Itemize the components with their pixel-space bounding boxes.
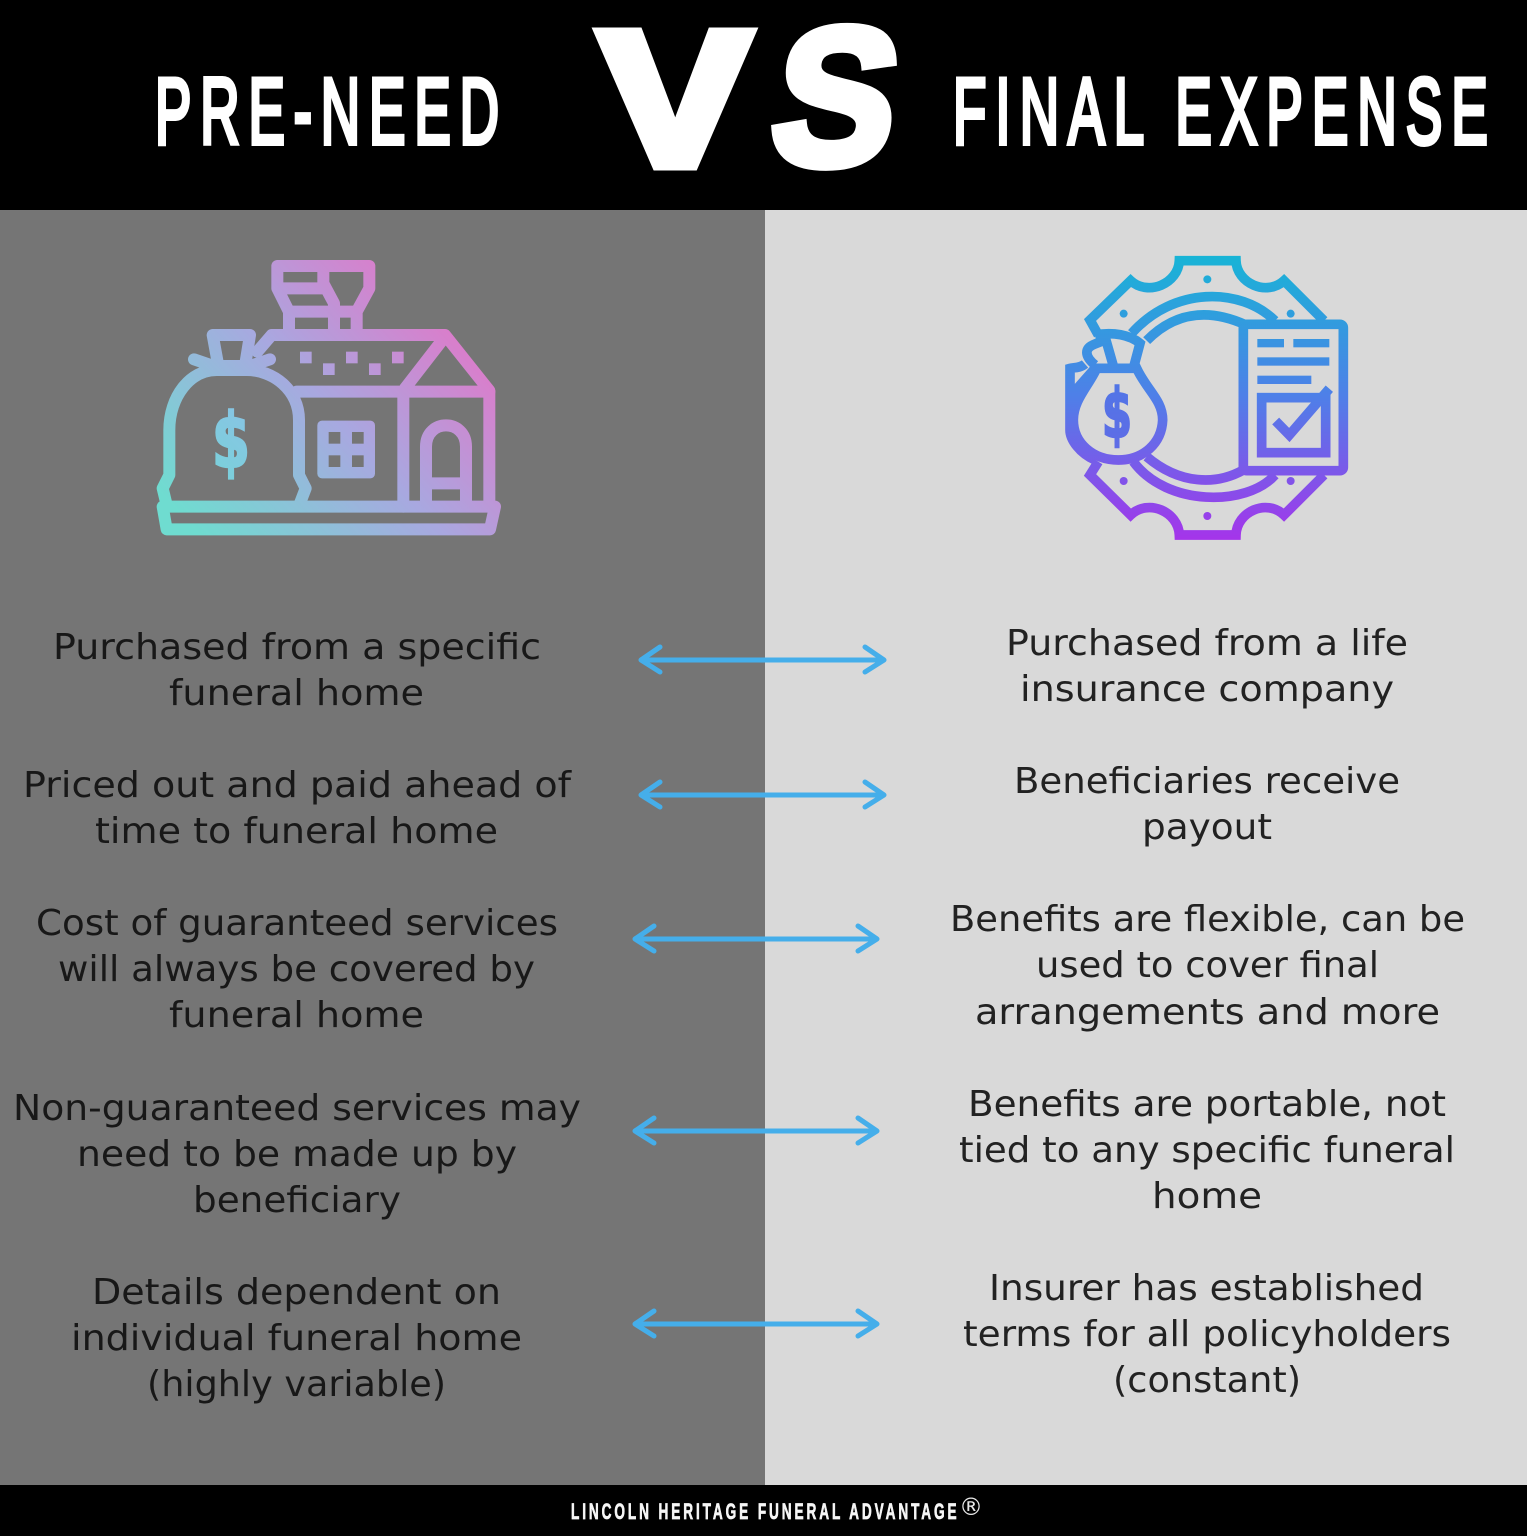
text block: final expense row 5: (constant) xyxy=(1113,1360,1301,1401)
text block: pre-need row 4 xyxy=(13,1088,581,1221)
text block: final expense row 1: insurance company xyxy=(1020,669,1394,710)
icon: dollar sign on small bag: $ xyxy=(1102,375,1132,454)
text block: final expense row 3: arrangements and more xyxy=(975,992,1440,1033)
text block: final expense row 1 xyxy=(1006,623,1408,710)
text block: pre-need row 5: individual funeral home xyxy=(71,1318,522,1359)
arrow: row 4 xyxy=(635,1118,877,1143)
text block: pre-need row 4: beneficiary xyxy=(193,1180,401,1221)
heading: pre-need: PRE-NEED xyxy=(155,59,499,164)
arrow: row 3 xyxy=(635,926,877,951)
text block: pre-need row 4: Non-guaranteed services may xyxy=(13,1088,581,1129)
icon: gear with money bag and document xyxy=(1070,261,1343,535)
arrow: row 2 xyxy=(641,782,884,807)
text block: final expense row 2 xyxy=(1014,761,1400,848)
text block: final expense row 4: home xyxy=(1152,1176,1262,1217)
text block: pre-need row 5 xyxy=(71,1272,522,1405)
text block: pre-need row 1: funeral home xyxy=(169,673,424,714)
arrow: row 5 xyxy=(635,1311,877,1336)
text block: final expense row 2: Beneficiaries receive xyxy=(1014,761,1400,802)
footer band xyxy=(0,1485,1527,1536)
text block: pre-need row 5: (highly variable) xyxy=(147,1364,446,1405)
text block: final expense row 5 xyxy=(963,1268,1451,1401)
text block: final expense row 4: tied to any specific funeral xyxy=(959,1130,1455,1171)
text block: pre-need row 2: Priced out and paid ahead of xyxy=(23,765,572,806)
footer text: LINCOLN HERITAGE FUNERAL ADVANTAGE xyxy=(571,1499,957,1524)
icon: dollar sign on bag: $ xyxy=(212,396,250,485)
text block: pre-need row 5: Details dependent on xyxy=(92,1272,501,1313)
heading: final expense: FINAL EXPENSE xyxy=(953,59,1488,164)
heading: VS xyxy=(601,0,913,206)
text block: final expense row 4 xyxy=(959,1084,1455,1217)
text block: final expense row 5: terms for all policyholders xyxy=(963,1314,1451,1355)
text block: final expense row 4: Benefits are portable, not xyxy=(968,1084,1446,1125)
text block: pre-need row 2 xyxy=(23,765,572,852)
panel: final expense column background xyxy=(765,210,1527,1485)
registered mark: ® xyxy=(959,1493,983,1521)
text block: final expense row 5: Insurer has established xyxy=(989,1268,1424,1309)
panel: pre-need column background xyxy=(0,210,765,1485)
heading: VS: V xyxy=(601,0,749,205)
text block: pre-need row 3: funeral home xyxy=(169,995,424,1036)
text block: final expense row 1: Purchased from a life xyxy=(1006,623,1408,664)
arrow: row 1 xyxy=(641,647,884,672)
text block: pre-need row 2: time to funeral home xyxy=(95,811,498,852)
text block: pre-need row 3: will always be covered by xyxy=(58,949,535,990)
panel: header band xyxy=(0,0,1527,210)
text block: final expense row 3: used to cover final xyxy=(1036,945,1379,986)
text block: pre-need row 1: Purchased from a specific xyxy=(53,627,541,668)
text block: pre-need row 3: Cost of guaranteed services xyxy=(36,903,558,944)
text block: final expense row 3 xyxy=(950,899,1465,1033)
icon: money bag and house xyxy=(163,266,495,529)
text block: pre-need row 1 xyxy=(53,627,541,714)
text block: pre-need row 3 xyxy=(36,903,558,1036)
text block: final expense row 2: payout xyxy=(1142,807,1272,848)
text block: final expense row 3: Benefits are flexible, can be xyxy=(950,899,1465,940)
text block: pre-need row 4: need to be made up by xyxy=(77,1134,517,1175)
